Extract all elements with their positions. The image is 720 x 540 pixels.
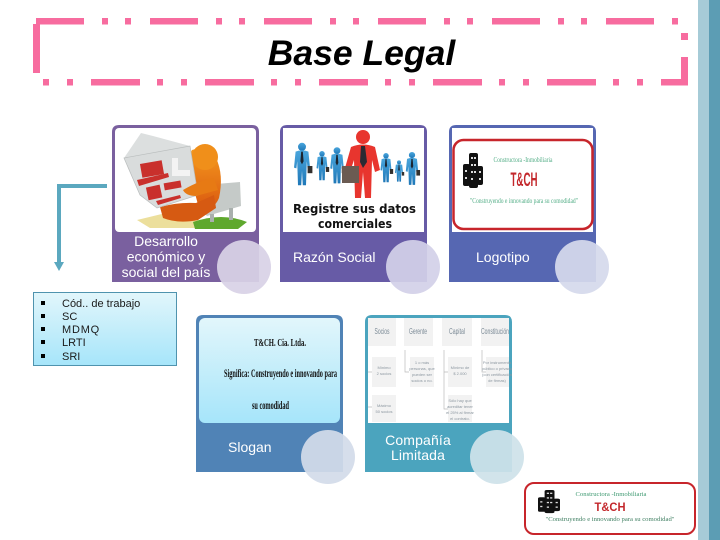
logo image: "Construyendo e innovando para su comodidad" xyxy=(470,197,578,205)
list text: MDMQ xyxy=(62,324,100,336)
title frame: dashed pink border xyxy=(33,18,688,86)
company structure table: $ 2.000 xyxy=(453,371,467,376)
image caption: comerciales xyxy=(318,217,392,231)
company structure table: (con certificación xyxy=(482,372,512,377)
label: Limitada xyxy=(391,447,445,463)
logo image: Constructora -Inmobiliaria xyxy=(494,156,553,164)
company structure table: pueden ser xyxy=(412,372,433,377)
bullets xyxy=(41,301,45,358)
panel: Compania Limitada xyxy=(365,315,524,484)
logo image xyxy=(454,140,592,229)
list text: Cód.. de trabajo xyxy=(62,298,140,310)
label: social del país xyxy=(122,264,210,280)
arrow xyxy=(59,186,107,263)
company structure table: Socios xyxy=(374,327,390,336)
image caption: Registre sus datos xyxy=(293,202,416,216)
logo: T&CH corner: T&CH xyxy=(594,500,626,514)
slogan text image: Significa: Construyendo e innovando para xyxy=(224,366,337,380)
company structure table: Sólo hay que xyxy=(448,398,472,403)
icon: person reading newspaper xyxy=(124,133,247,229)
panel: Desarrollo economico y social del pais xyxy=(112,125,271,294)
slogan text image: su comodidad xyxy=(252,398,289,412)
label xyxy=(385,432,451,463)
slogan text image: T&CH. Cia. Ltda. xyxy=(254,337,306,349)
list text: SRI xyxy=(62,351,80,363)
company structure table: Mínimo de xyxy=(451,365,470,370)
list text xyxy=(62,298,140,363)
company structure table: Capital xyxy=(449,327,465,336)
company structure table: Gerente xyxy=(409,327,427,336)
icon: buildings xyxy=(538,490,560,513)
badge circle xyxy=(217,240,271,294)
label xyxy=(122,233,210,280)
company structure table: Por instrumento xyxy=(483,360,512,365)
label: Logotipo xyxy=(476,249,530,265)
company structure table: personas, que xyxy=(409,366,435,371)
company structure table: Máximo xyxy=(377,403,392,408)
logo: T&CH corner: Constructora -Inmobiliaria xyxy=(576,492,647,498)
company structure table: de firmas) xyxy=(488,378,507,383)
company structure table: el contrato. xyxy=(450,416,470,421)
company structure table: Mínimo xyxy=(377,365,391,370)
label: Slogan xyxy=(228,439,272,455)
label: Compañía xyxy=(385,432,451,448)
label: Razón Social xyxy=(293,249,376,265)
company structure table: el 25% al firmar xyxy=(446,410,475,415)
company structure table xyxy=(368,318,513,422)
company structure table: público o privado xyxy=(482,366,513,371)
logo: T&CH corner: "Construyendo e innovando para su comodidad" xyxy=(546,517,675,523)
label: Desarrollo xyxy=(134,233,198,249)
panel: Slogan xyxy=(196,315,355,484)
sidebar stripe xyxy=(698,0,720,540)
title: Base Legal xyxy=(268,33,456,73)
panel: Razon Social xyxy=(280,125,440,294)
badge circle xyxy=(555,240,609,294)
label: económico y xyxy=(127,248,205,264)
list text: SC xyxy=(62,311,77,323)
badge circle xyxy=(386,240,440,294)
list text: LRTI xyxy=(62,337,86,349)
badge circle xyxy=(470,430,524,484)
company structure table: 1 o más xyxy=(415,360,429,365)
company structure table: acreditar tener xyxy=(447,404,474,409)
image caption xyxy=(293,202,416,231)
panel: list of regulations xyxy=(34,292,176,366)
logo image: T&CH xyxy=(510,170,538,191)
company structure table: 50 socios xyxy=(376,409,392,414)
company structure table: 2 socios xyxy=(377,371,391,376)
logo: T&CH corner xyxy=(525,483,695,534)
badge circle xyxy=(301,430,355,484)
company structure table: socios o no. xyxy=(411,378,433,383)
panel: Logotipo xyxy=(449,125,609,294)
slogan text image xyxy=(224,337,337,412)
icon: business people xyxy=(294,130,420,198)
company structure table: Constitución xyxy=(481,327,509,336)
